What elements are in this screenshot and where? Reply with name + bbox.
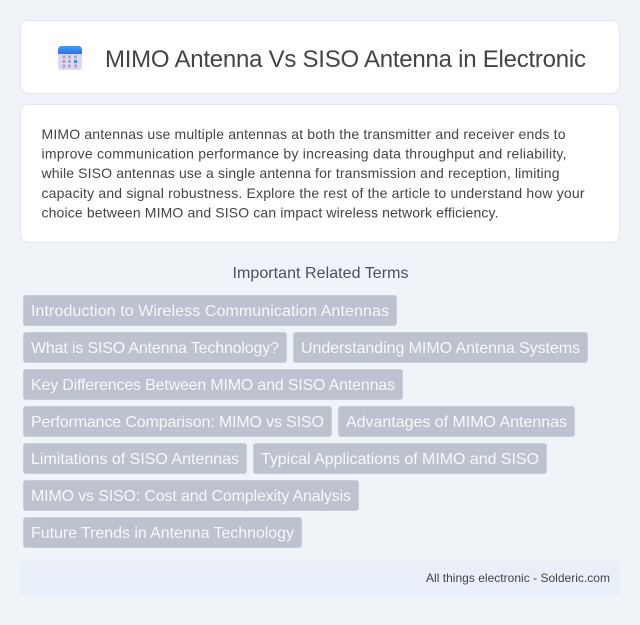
chip: limitations [24,444,246,474]
text block: intro paragraph: while SISO antennas use a single antenna for transmission and reception, limiting [40,165,560,181]
chip: limitations: Limitations of SISO Antennas [31,451,239,468]
text block: intro paragraph: improve communication performance by increasing data throughput and reliability, [42,146,566,162]
chip: introduction: Introduction to Wireless Communication Antennas [31,303,389,320]
chip: typical applications: Typical Applications of MIMO and SISO [261,451,539,468]
chip: advantages [338,406,574,436]
text block: intro paragraph: MIMO antennas use multiple antennas at both the transmitter and receiver ends to [42,126,566,142]
chip: future trends: Future Trends in Antenna Technology [31,525,294,542]
chip: key differences: Key Differences Between MIMO and SISO Antennas [31,377,395,394]
chip: future trends [24,518,302,548]
footer bar [20,561,620,595]
icon: calendar grid [58,46,82,70]
chip: what is SISO: What is SISO Antenna Technology? [31,340,279,357]
text block: intro paragraph: capacity and signal robustness. Explore the rest of the article to understand how your [42,185,585,201]
panel: related term chips [24,296,588,548]
heading: important related terms: Important Related Terms [232,265,408,282]
chip: performance comparison: Performance Comparison: MIMO vs SISO [31,414,324,431]
panel: header card [20,20,620,94]
chip: understanding MIMO: Understanding MIMO Antenna Systems [301,340,580,357]
chip: understanding MIMO [294,332,588,362]
title: MIMO Antenna Vs SISO Antenna in Electronic [105,46,586,73]
chip: what is SISO [24,332,286,362]
chip: typical applications [254,444,546,474]
chip: cost and complexity: MIMO vs SISO: Cost and Complexity Analysis [31,488,351,505]
chip: cost and complexity [24,480,358,510]
chip: performance comparison [24,406,332,436]
footer credit: All things electronic - Solderic.com [426,571,610,585]
text block: intro paragraph [40,126,585,220]
chip: advantages: Advantages of MIMO Antennas [346,414,567,431]
chip: key differences [24,370,402,400]
panel: intro paragraph card [20,104,620,242]
text block: intro paragraph: choice between MIMO and SISO can impact wireless network efficiency. [42,204,498,220]
chip: introduction [24,296,396,326]
